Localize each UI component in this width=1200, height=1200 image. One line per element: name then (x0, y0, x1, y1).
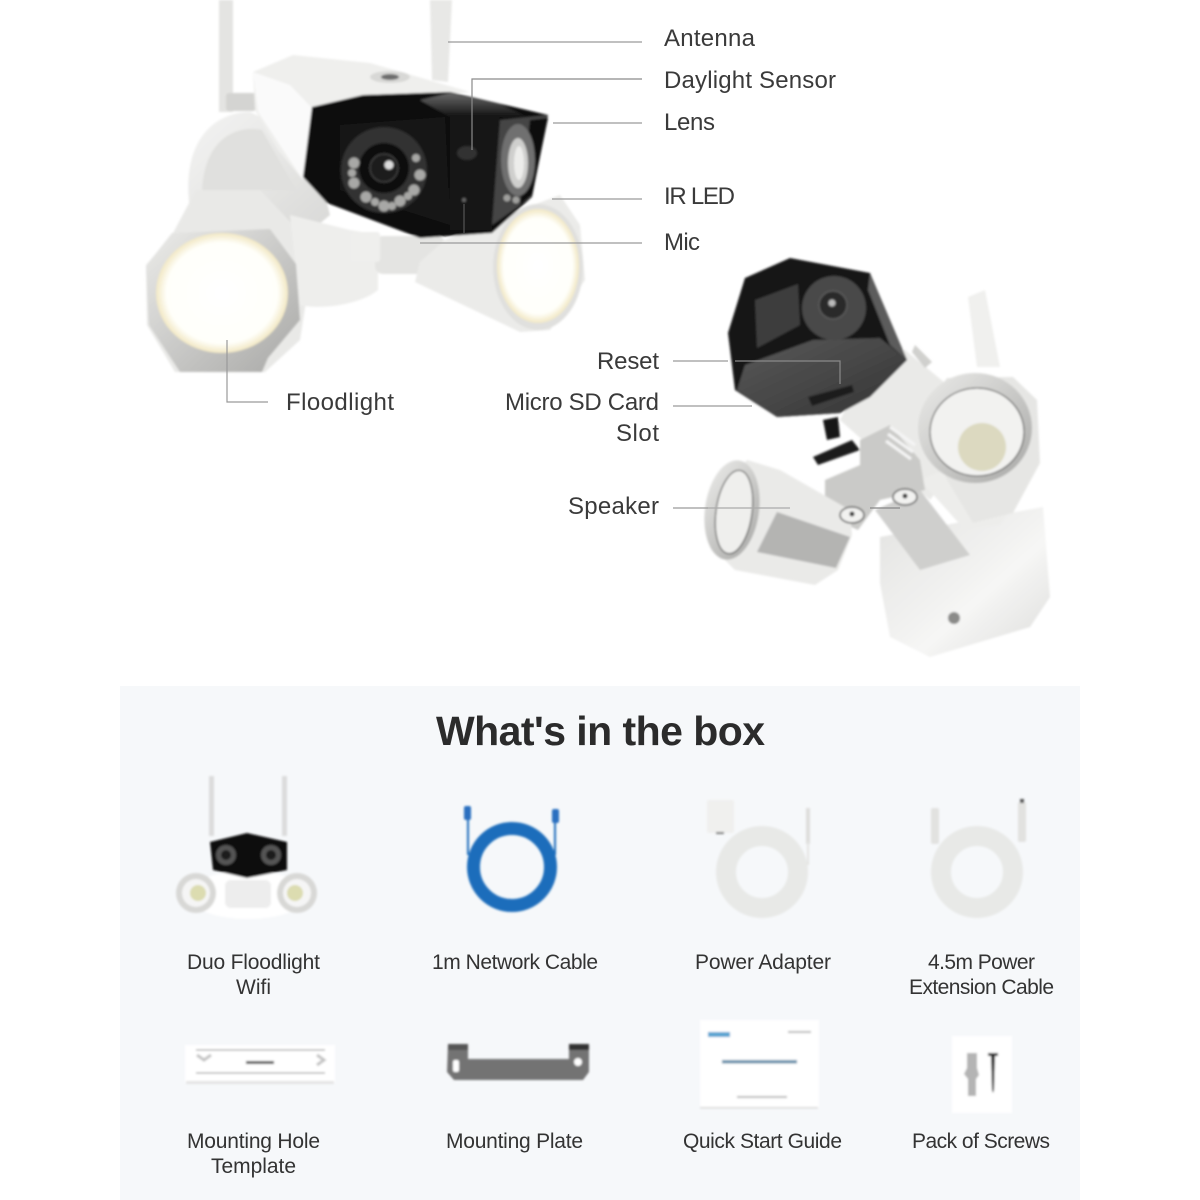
right antenna (430, 0, 452, 82)
item: network cable (464, 806, 559, 906)
antenna hinge (226, 93, 256, 111)
label: IR LED: IR LED (664, 183, 735, 210)
daylight sensor dot (457, 146, 477, 160)
rear antenna (968, 290, 1000, 367)
item label: Power Adapter: Power Adapter (695, 951, 831, 974)
left antenna (219, 0, 233, 112)
right floodlight arm (415, 195, 585, 332)
item label: 4.5m Power Extension Cable: 4.5m Power (928, 951, 1035, 974)
item: power adapter (707, 800, 810, 908)
label: Reset: Reset (597, 348, 659, 375)
camera rear exploded view illustration (698, 258, 1050, 657)
label: Mic: Mic (664, 229, 700, 256)
label: Micro SD Card Slot: Micro SD Card (505, 389, 659, 416)
head front panel (755, 284, 800, 348)
label: Speaker: Speaker (568, 493, 659, 520)
right floodlight LED (958, 423, 1006, 471)
camera body shell (253, 55, 470, 180)
item: mounting plate (447, 1044, 589, 1080)
item label: 4.5m Power Extension Cable: Extension Cable (909, 976, 1054, 999)
item label: Mounting Hole Template: Mounting Hole (187, 1130, 320, 1153)
leader lines lower (673, 361, 900, 508)
item label: Quick Start Guide: Quick Start Guide (683, 1130, 842, 1153)
left floodlight lens (156, 233, 288, 353)
item: mounting hole template (185, 1045, 335, 1084)
left floodlight housing (706, 460, 852, 585)
item label: 1m Network Cable: 1m Network Cable (432, 951, 598, 974)
mount screw hole (948, 612, 960, 624)
label: Lens: Lens (664, 109, 715, 136)
item label: Mounting Hole Template (187, 1130, 320, 1178)
bracket (825, 425, 925, 530)
item: extension cable (931, 799, 1026, 908)
side lens panel (492, 115, 548, 225)
item: camera thumbnail (176, 776, 317, 919)
item label: Duo Floodlight Wifi: Wifi (236, 976, 271, 999)
left floodlight housing (146, 190, 312, 372)
right floodlight housing (923, 377, 1040, 523)
front lens LED ring (341, 127, 427, 213)
item: quick start guide (700, 1020, 819, 1108)
micro SD card (823, 417, 840, 440)
arm to base (875, 490, 970, 570)
head side panel (868, 273, 907, 360)
camera body rear (840, 345, 990, 500)
item label: Duo Floodlight Wifi: Duo Floodlight (187, 951, 320, 974)
black camera head (303, 92, 548, 238)
item label: Mounting Hole Template: Template (211, 1155, 296, 1178)
front panel (340, 117, 450, 225)
card slot (808, 385, 854, 406)
head lower face (737, 338, 907, 417)
top highlight (420, 93, 530, 118)
mic hole (462, 198, 466, 202)
screws (840, 489, 917, 523)
right floodlight ring (918, 373, 1032, 483)
label: Daylight Sensor: Daylight Sensor (664, 67, 836, 94)
label: Micro SD Card Slot: Slot (616, 420, 659, 447)
left floodlight ring (698, 457, 766, 563)
left floodlight front ring (146, 229, 300, 372)
item label: Duo Floodlight Wifi (187, 951, 320, 999)
label: Floodlight: Floodlight (286, 389, 394, 416)
black camera head (728, 258, 907, 417)
rear arm dome (188, 112, 330, 240)
slot cover (813, 440, 860, 465)
label: Antenna: Antenna (664, 25, 756, 52)
leader lines upper (227, 42, 642, 402)
head lens (802, 276, 866, 340)
centre bracket (290, 215, 380, 307)
item label: 4.5m Power Extension Cable (909, 951, 1054, 999)
panel background (120, 686, 1080, 1200)
wall mount base (880, 507, 1050, 657)
panel: what's in the box (120, 686, 1080, 1200)
label: Micro SD Card Slot (505, 389, 659, 447)
item: pack of screws (952, 1036, 1012, 1113)
right floodlight lens (493, 204, 583, 330)
vent stripes (886, 427, 915, 459)
item label: Pack of Screws: Pack of Screws (912, 1130, 1050, 1153)
item label: Mounting Plate: Mounting Plate (446, 1130, 583, 1153)
camera front view illustration (146, 0, 585, 372)
title: What's in the box (436, 708, 765, 754)
